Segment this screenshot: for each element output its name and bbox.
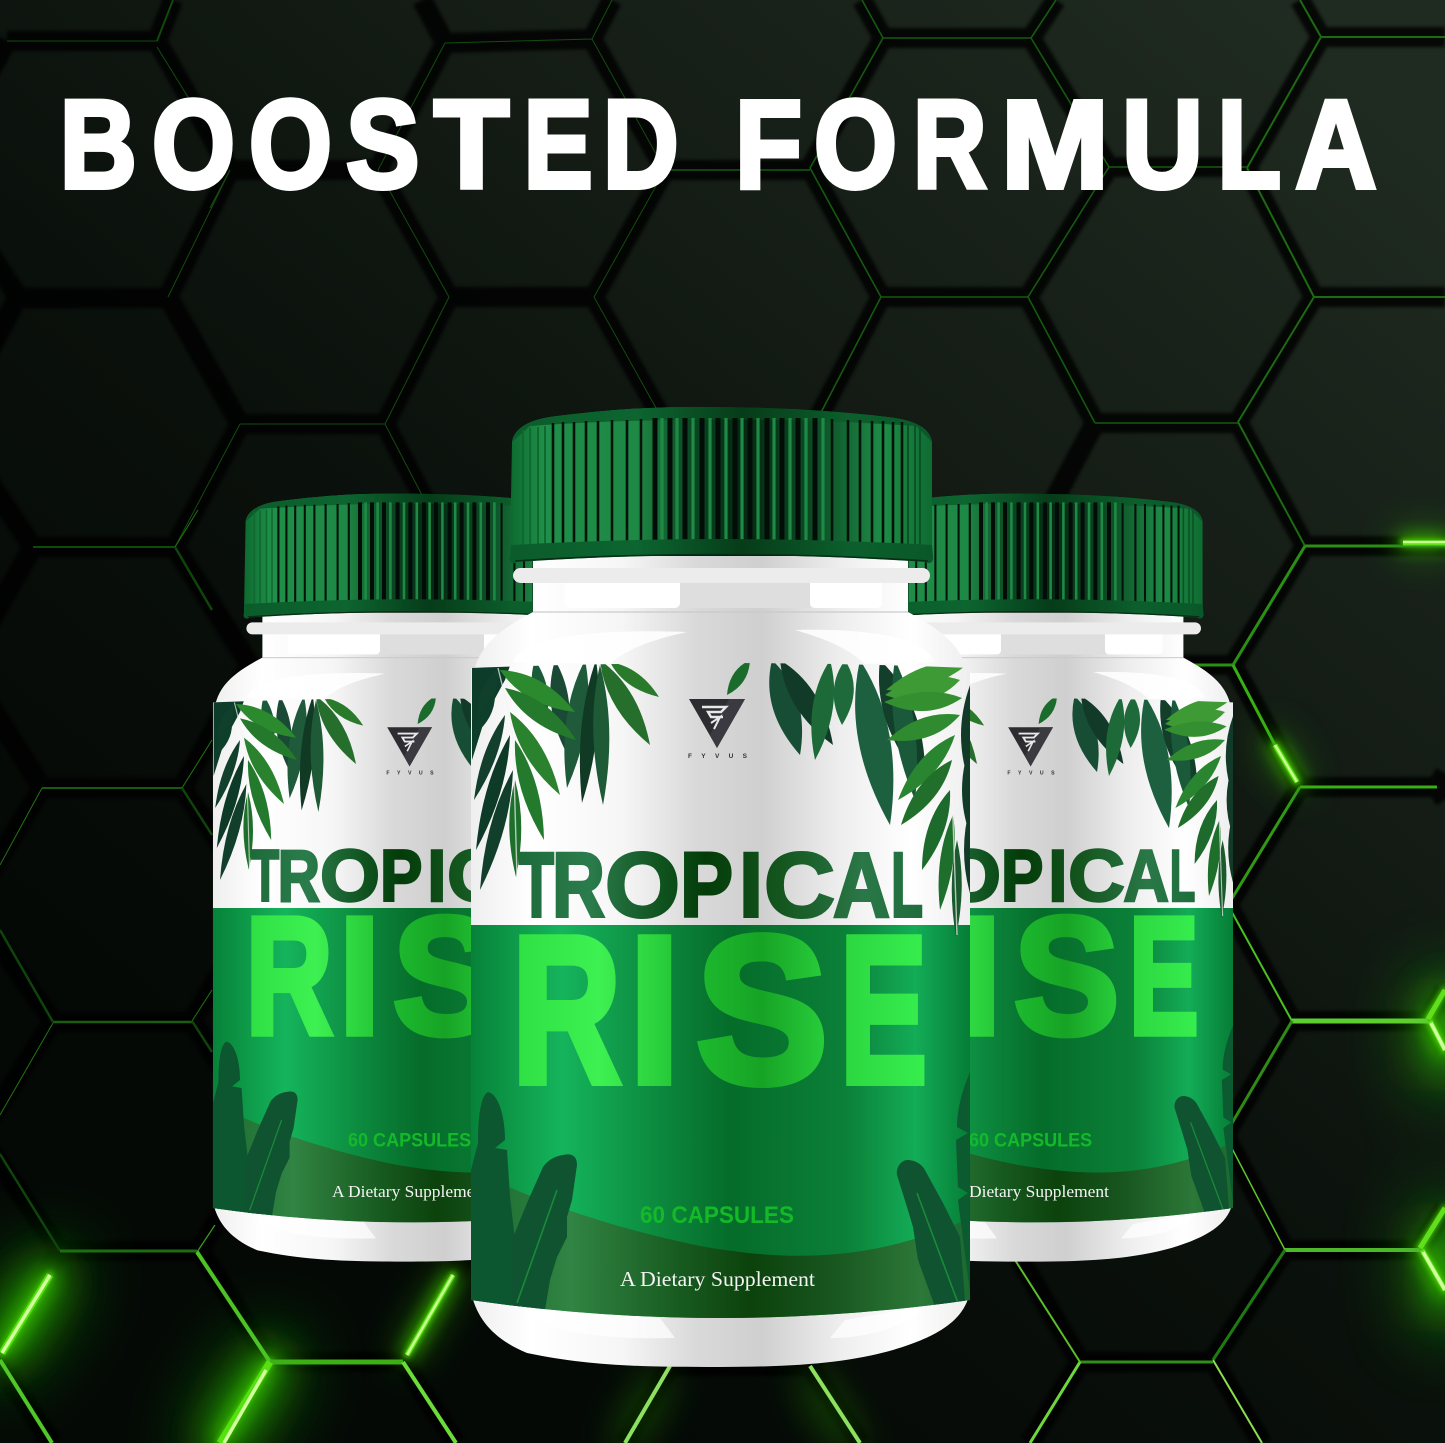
- title: F: [735, 76, 802, 214]
- bottle: right: A: [1123, 834, 1169, 917]
- bottle: left: L: [549, 834, 574, 917]
- product name: TROPICAL: P: [680, 834, 733, 936]
- product name: RISE: R: [512, 894, 621, 1127]
- bottle: left: 60 CAPSULES: [348, 1130, 471, 1151]
- product name: TROPICAL: I: [739, 834, 763, 936]
- bottle: left: S: [393, 884, 498, 1070]
- bottle: left: P: [380, 834, 422, 917]
- title: D: [603, 76, 679, 214]
- title: B: [60, 76, 137, 214]
- product name: TROPICAL: O: [605, 834, 680, 936]
- bottle: left: A Dietary Supplement: [332, 1182, 488, 1201]
- title: A: [1296, 76, 1376, 214]
- bottle: left: R: [246, 884, 333, 1070]
- bottle: center: [471, 407, 972, 1367]
- product name: RISE: E: [840, 894, 927, 1127]
- title: M: [1001, 76, 1109, 214]
- bottle: left: E: [508, 884, 578, 1070]
- title: E: [524, 76, 593, 214]
- product name: TROPICAL: C: [764, 834, 835, 936]
- title: L: [1218, 76, 1281, 214]
- bottle: right: L: [1170, 834, 1195, 917]
- title: T: [434, 76, 509, 214]
- title: [60, 76, 1376, 214]
- capsule count: 60 CAPSULES: [640, 1202, 794, 1229]
- bottle: right: R: [867, 884, 954, 1070]
- title: R: [913, 76, 986, 214]
- product name: TROPICAL: R: [552, 834, 605, 936]
- bottle: left: O: [320, 834, 380, 917]
- title: O: [152, 76, 235, 214]
- product name: TROPICAL: A: [833, 834, 890, 936]
- bottle: right: S: [1014, 884, 1119, 1070]
- bottle: left: I: [427, 834, 446, 917]
- supplement label: A Dietary Supplement: [620, 1267, 815, 1291]
- bottle: left: C: [447, 834, 504, 917]
- bottle: right: FYVUS: [1007, 770, 1055, 776]
- bottle: right: I: [960, 884, 1001, 1070]
- bottle: right: C: [1068, 834, 1125, 917]
- bottle: right: 60 CAPSULES: [969, 1130, 1092, 1151]
- product name: RISE: S: [696, 894, 828, 1127]
- product name: TROPICAL: L: [891, 834, 923, 936]
- bottle: left: I: [339, 884, 380, 1070]
- bottle: right: E: [1129, 884, 1199, 1070]
- brand name: FYVUS: [688, 753, 748, 760]
- bottle: left: R: [278, 834, 320, 917]
- bottle: right: I: [1048, 834, 1067, 917]
- bottle: right: T: [872, 834, 900, 917]
- neon glow: [0, 542, 1445, 1443]
- bottle: right: P: [1001, 834, 1043, 917]
- bottle: left: T: [251, 834, 279, 917]
- product name: RISE: I: [629, 894, 680, 1127]
- bottle: left: FYVUS: [386, 770, 434, 776]
- bottle: right: A Dietary Supplement: [953, 1182, 1109, 1201]
- title: U: [1122, 76, 1203, 214]
- bottle: left: [213, 494, 614, 1262]
- bottle: right: O: [941, 834, 1001, 917]
- product name: TROPICAL: T: [519, 834, 554, 936]
- title: O: [249, 76, 332, 214]
- bottle: right: R: [899, 834, 941, 917]
- bottle: right: [834, 494, 1235, 1262]
- title: O: [814, 76, 897, 214]
- title: S: [346, 76, 420, 214]
- bottle: left: A: [502, 834, 548, 917]
